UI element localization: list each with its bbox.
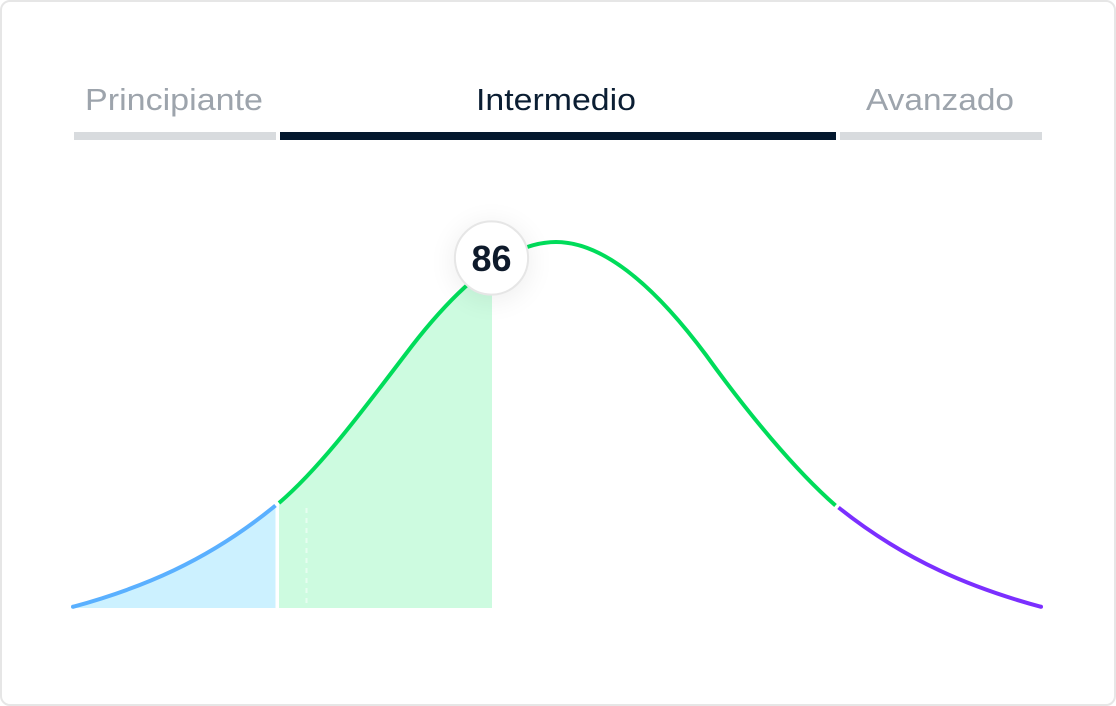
bar: Intermedio [280, 132, 836, 140]
badge circle [455, 221, 528, 295]
label: Principiante: Principiante [85, 82, 263, 117]
bar: Avanzado [840, 132, 1042, 140]
curve: beginner segment [73, 506, 276, 607]
bar: Principiante [74, 132, 276, 140]
blue end cap [71, 605, 75, 609]
bell curve chart [71, 242, 1043, 609]
purple end cap [1039, 605, 1043, 609]
area: intermediate up to score [279, 287, 492, 608]
score value: 86 [471, 238, 512, 279]
label: Avanzado: Avanzado [866, 82, 1014, 117]
level tabs [74, 82, 1042, 140]
curve: intermediate segment [279, 242, 836, 506]
badge shadow [454, 224, 530, 300]
score badge [454, 221, 530, 300]
label: Intermedio: Intermedio [476, 82, 636, 117]
curve: advanced segment [838, 508, 1041, 607]
area: beginner [72, 506, 276, 608]
score marker dashed line [306, 508, 308, 608]
